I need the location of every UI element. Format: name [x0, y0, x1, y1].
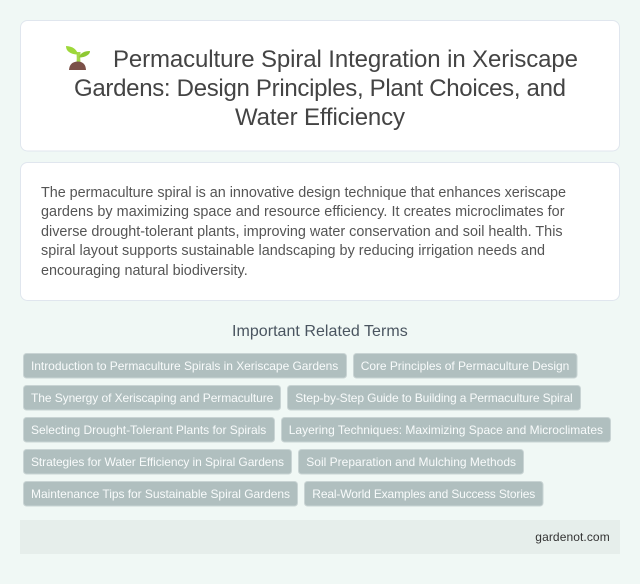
tag: maintenance — [24, 482, 298, 506]
tag: selecting plants — [24, 418, 274, 442]
text block: description — [41, 185, 566, 279]
heading: important related terms: Important Related Terms — [232, 323, 408, 340]
heading: title: Gardens: Design Principles, Plant Choices, and — [74, 75, 566, 102]
tag: core principles — [354, 354, 577, 378]
tag: synergy — [24, 386, 280, 410]
tag: step-by-step: Step-by-Step Guide to Building a Permaculture Spiral — [295, 391, 573, 405]
tag: real-world: Real-World Examples and Success Stories — [312, 487, 535, 501]
tag: water efficiency: Strategies for Water Efficiency in Spiral Gardens — [31, 455, 284, 469]
tag: layering — [282, 418, 610, 442]
text block: description: spiral layout supports sustainable landscaping by reducing irrigation needs and — [41, 243, 545, 259]
tag: synergy: The Synergy of Xeriscaping and Permaculture — [31, 391, 274, 405]
tag: introduction — [24, 354, 346, 378]
heading: title — [74, 46, 578, 131]
tag list — [24, 354, 610, 506]
tag: real-world — [304, 482, 543, 506]
footer: gardenot.com — [535, 530, 610, 544]
tag: selecting plants: Selecting Drought-Tolerant Plants for Spirals — [31, 423, 266, 437]
text block: description: The permaculture spiral is an innovative design technique that enhances xeriscape — [41, 185, 566, 201]
heading: title: Water Efficiency — [235, 104, 405, 131]
tag: maintenance: Maintenance Tips for Sustainable Spiral Gardens — [31, 487, 290, 501]
tag: soil preparation — [298, 450, 524, 474]
text block: description: gardens by maximizing space and resource efficiency. It creates microclimates for — [41, 204, 565, 220]
footer — [20, 520, 620, 554]
heading: title: Permaculture Spiral Integration in Xeriscape — [113, 46, 578, 73]
tag: layering: Layering Techniques: Maximizing Space and Microclimates — [289, 423, 603, 437]
text block: description: diverse drought-tolerant plants, improving water conservation and soil health. This — [41, 224, 563, 240]
tag: core principles: Core Principles of Permaculture Design — [361, 359, 569, 373]
tag: water efficiency — [24, 450, 292, 474]
text block: description: encouraging natural biodiversity. — [41, 263, 248, 279]
panel: description card — [20, 162, 620, 300]
tag: soil preparation: Soil Preparation and Mulching Methods — [306, 455, 516, 469]
tag: step-by-step — [288, 386, 580, 410]
panel: title card — [20, 20, 620, 151]
tag: introduction: Introduction to Permaculture Spirals in Xeriscape Gardens — [31, 359, 338, 373]
icon: seedling — [66, 46, 90, 70]
